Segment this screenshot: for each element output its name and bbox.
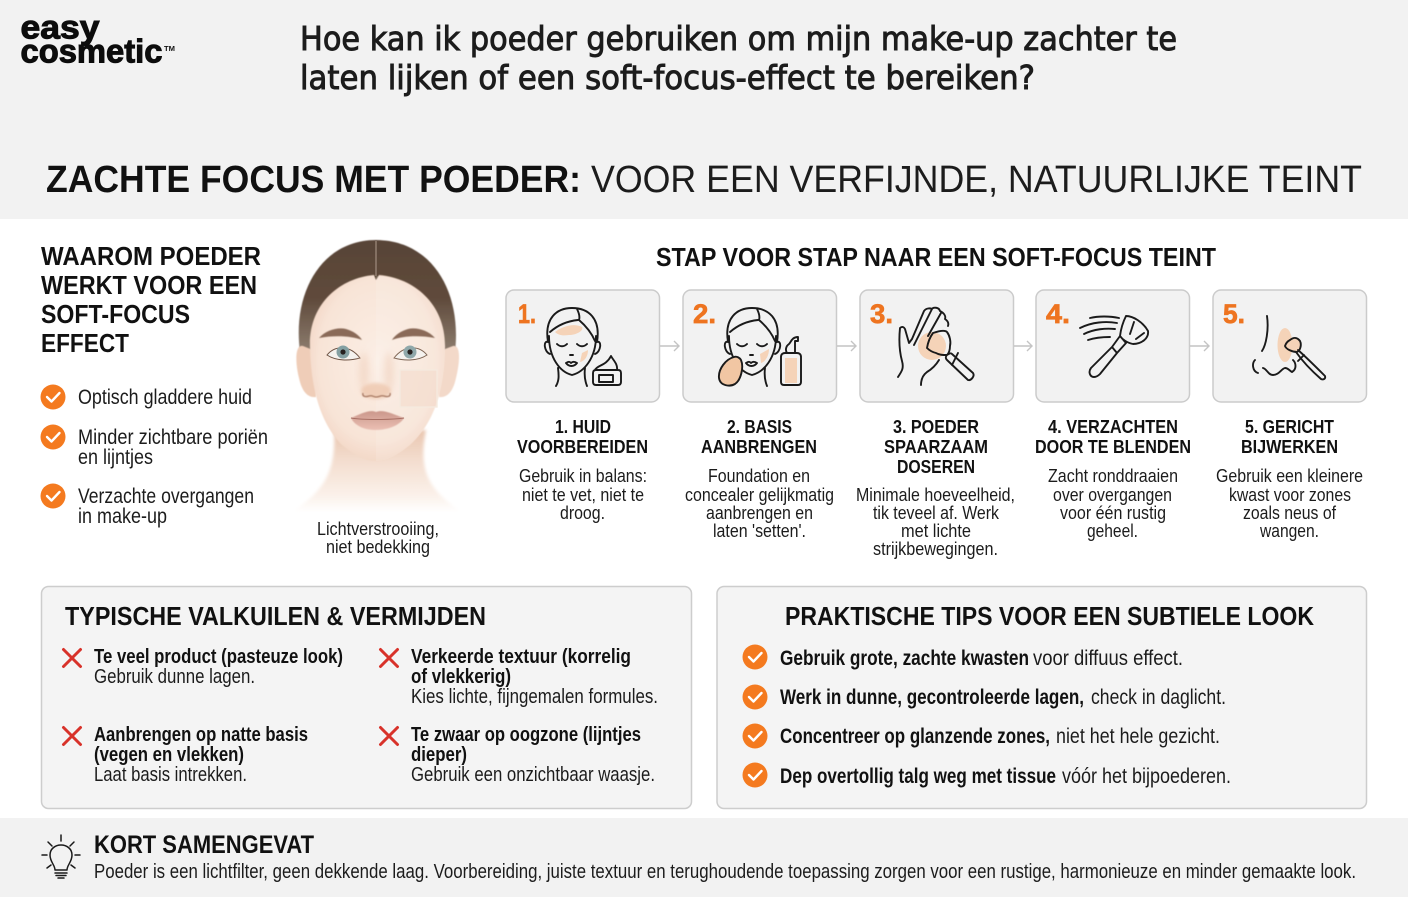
- logo: easy cosmetic: cosmetic: [20, 32, 162, 70]
- step 1 text: VOORBEREIDEN: [517, 437, 648, 457]
- step 1: 1.: [518, 299, 536, 329]
- question title: [300, 19, 1177, 97]
- step 2 text: AANBRENGEN: [701, 437, 817, 457]
- panel: pitfalls: TYPISCHE VALKUILEN & VERMIJDEN: [65, 601, 486, 631]
- tip 3: [742, 724, 1220, 748]
- step 3 text: tik teveel af. Werk: [873, 503, 1000, 523]
- pitfall: wrong texture: of vlekkerig): [411, 666, 511, 688]
- question title: laten lijken of een soft-focus-effect te bereiken?: [300, 58, 1035, 97]
- step 3 text: 3. POEDER: [893, 417, 979, 437]
- benefit list: Minder zichtbare poriën: [78, 426, 268, 449]
- summary band: [0, 818, 1408, 897]
- step 1 arrow: [660, 341, 679, 351]
- tip 1: Gebruik grote, zachte kwasten: [780, 647, 1029, 670]
- pitfall: too heavy on eye area: Gebruik een onzichtbaar waasje.: [411, 764, 655, 786]
- step 1 text: niet te vet, niet te: [522, 485, 644, 505]
- benefit list: en lijntjes: [78, 446, 153, 469]
- question title: Hoe kan ik poeder gebruiken om mijn make-up zachter te: [300, 19, 1177, 58]
- step 5 text: [1216, 417, 1363, 541]
- icon: nose with small brush: [1253, 316, 1325, 379]
- step 2 text: Foundation en: [708, 466, 810, 486]
- panel: practical tips: [717, 586, 1366, 808]
- heading: why powder works: [41, 241, 261, 358]
- step 4 text: voor één rustig: [1060, 503, 1166, 523]
- pitfall: wrong texture: Kies lichte, fijngemalen formules.: [411, 686, 658, 708]
- step 1: [506, 290, 660, 402]
- portrait caption: niet bedekking: [326, 537, 430, 557]
- tip 2: Werk in dunne, gecontroleerde lagen,: [780, 686, 1084, 709]
- heading: why powder works: SOFT-FOCUS: [41, 299, 190, 329]
- step 3 text: DOSEREN: [897, 457, 975, 477]
- summary band: KORT SAMENGEVAT: [94, 831, 314, 859]
- pitfall: wet base: (vegen en vlekken): [94, 744, 244, 766]
- pitfall: too much product: [64, 646, 343, 688]
- step 5: [1213, 290, 1366, 402]
- tip 4: Dep overtollig talg weg met tissue: [780, 765, 1056, 788]
- heading: why powder works: WERKT VOOR EEN: [41, 270, 257, 300]
- step 1 text: Gebruik in balans:: [519, 466, 647, 486]
- icon: face with cream jar: [545, 308, 621, 386]
- tip 4: [742, 762, 1231, 788]
- step 4 text: Zacht ronddraaien: [1048, 466, 1178, 486]
- step 2: [683, 290, 836, 402]
- benefit list: Verzachte overgangen: [78, 485, 254, 508]
- tip 3: Concentreer op glanzende zones,: [780, 725, 1050, 748]
- step 5: 5.: [1223, 299, 1245, 329]
- pitfall: wet base: Aanbrengen op natte basis: [94, 724, 308, 746]
- tip 2: check in daglicht.: [1091, 686, 1226, 709]
- pitfall: wet base: [64, 724, 308, 786]
- step 5 text: Gebruik een kleinere: [1216, 466, 1363, 486]
- pitfall: wrong texture: Verkeerde textuur (korrelig: [411, 646, 631, 668]
- heading: why powder works: WAAROM POEDER: [41, 241, 261, 271]
- step 1 text: [517, 417, 648, 523]
- icon: face with sponge and foundation bottle: [719, 308, 801, 386]
- step 2 arrow: [837, 341, 856, 351]
- tip 1: [742, 644, 1183, 670]
- tip 3: niet het hele gezicht.: [1056, 725, 1220, 748]
- step 3 text: [856, 417, 1015, 559]
- step 3 text: strijkbewegingen.: [873, 539, 998, 559]
- step 3 text: Minimale hoeveelheid,: [856, 485, 1015, 505]
- step 4 text: 4. VERZACHTEN: [1048, 417, 1178, 437]
- step 2 text: laten 'setten'.: [713, 521, 806, 541]
- step 2: 2.: [693, 299, 716, 329]
- portrait illustration: [292, 240, 462, 512]
- step 2 text: concealer gelijkmatig: [685, 485, 834, 505]
- benefit list: in make-up: [78, 505, 167, 528]
- main heading: ZACHTE FOCUS MET POEDER:: [46, 159, 581, 201]
- tip 4: vóór het bijpoederen.: [1062, 765, 1231, 788]
- pitfall: wet base: Laat basis intrekken.: [94, 764, 247, 786]
- step 3: [860, 290, 1014, 402]
- step 4 text: geheel.: [1087, 521, 1138, 541]
- panel: practical tips: PRAKTISCHE TIPS VOOR EEN SUBTIELE LOOK: [785, 601, 1314, 631]
- benefit list: Optisch gladdere huid: [78, 386, 252, 409]
- pitfall: too heavy on eye area: Te zwaar op oogzone (lijntjes: [411, 724, 641, 746]
- pitfall: too heavy on eye area: dieper): [411, 744, 467, 766]
- panel: pitfalls: [42, 586, 692, 808]
- step 5 text: BIJWERKEN: [1241, 437, 1338, 457]
- step 4 arrow: [1190, 341, 1209, 351]
- step 3: 3.: [870, 299, 893, 329]
- icon: light bulb: [42, 835, 80, 878]
- logo: easy cosmetic: TM: [164, 46, 175, 53]
- step 4 text: [1035, 417, 1191, 541]
- tip 1: voor diffuus effect.: [1033, 647, 1183, 670]
- step 4: [1036, 290, 1190, 402]
- logo: easy cosmetic: [20, 8, 175, 70]
- logo: easy cosmetic: easy: [20, 8, 100, 46]
- step 4 text: DOOR TE BLENDEN: [1035, 437, 1191, 457]
- pitfall: too heavy on eye area: [380, 724, 655, 786]
- step 5 text: 5. GERICHT: [1245, 417, 1334, 437]
- step 4 text: over overgangen: [1053, 485, 1172, 505]
- main heading: [46, 159, 1362, 201]
- step 5 text: zoals neus of: [1243, 503, 1337, 523]
- step 2 text: 2. BASIS: [727, 417, 792, 437]
- step 3 text: SPAARZAAM: [884, 437, 988, 457]
- step 4: 4.: [1046, 299, 1070, 329]
- icon: hand with powder brush: [898, 308, 974, 385]
- heading: step by step: STAP VOOR STAP NAAR EEN SOFT-FOCUS TEINT: [656, 242, 1216, 272]
- step 3 text: met lichte: [901, 521, 971, 541]
- step 2 text: [685, 417, 834, 541]
- pitfall: too much product: Te veel product (pasteuze look): [94, 646, 343, 668]
- step 3 arrow: [1014, 341, 1032, 351]
- portrait caption: Lichtverstrooiing,: [317, 519, 439, 539]
- header background: [0, 0, 1408, 219]
- benefit list: [40, 384, 268, 528]
- step 1 text: 1. HUID: [555, 417, 611, 437]
- main heading: VOOR EEN VERFIJNDE, NATUURLIJKE TEINT: [591, 159, 1362, 201]
- pitfall: too much product: Gebruik dunne lagen.: [94, 666, 255, 688]
- step 2 text: aanbrengen en: [706, 503, 813, 523]
- icon: blending brush: [1080, 316, 1148, 377]
- pitfall: wrong texture: [380, 646, 658, 708]
- step 5 text: kwast voor zones: [1229, 485, 1351, 505]
- portrait caption: [317, 519, 439, 557]
- step 5 text: wangen.: [1259, 521, 1319, 541]
- step 1 text: droog.: [560, 503, 605, 523]
- heading: why powder works: EFFECT: [41, 328, 129, 358]
